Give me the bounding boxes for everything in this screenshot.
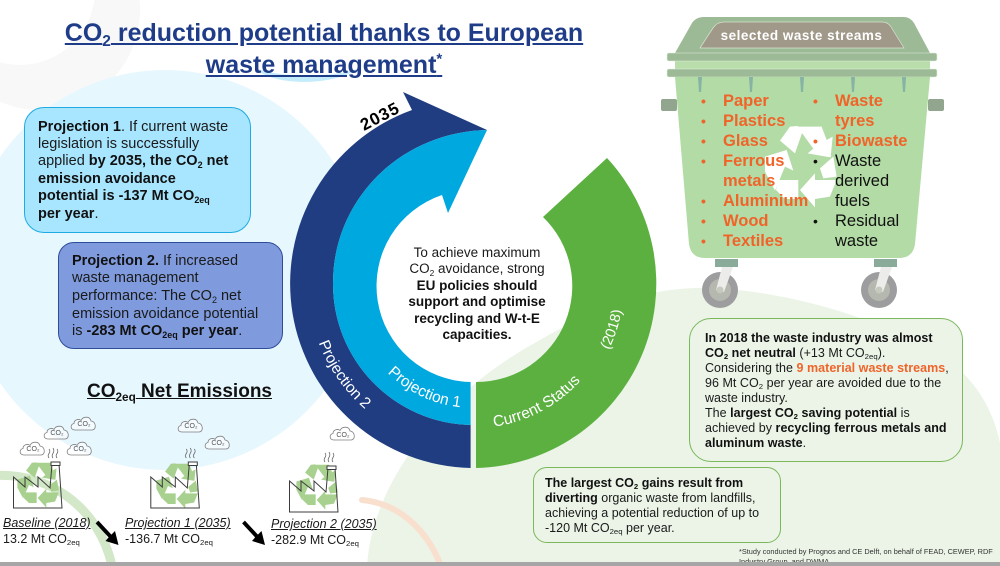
list: right waste streams: •	[813, 213, 818, 229]
icon: factory projection 2	[290, 427, 354, 512]
panel: projection 2	[58, 242, 283, 349]
panel: projection 1: legislation is successfully	[38, 136, 199, 152]
list: right waste streams: •	[813, 153, 818, 169]
list: left waste streams: Wood	[723, 212, 769, 230]
footnote: Industry Group, and DWMA.	[739, 557, 831, 566]
list: right waste streams: waste	[835, 232, 878, 250]
bin label: selected waste streams	[721, 28, 882, 43]
center message: To achieve maximum	[414, 245, 540, 260]
panel: organic waste: The largest CO2 gains result from	[545, 476, 743, 491]
panel: waste industry 2018: waste industry.	[705, 390, 788, 404]
title: waste management*	[206, 51, 442, 79]
label: 2035: 2035	[357, 98, 403, 135]
footnote: *Study conducted by Prognos and CE Delft, on behalf of FEAD, CEWEP, RDF	[739, 547, 993, 556]
list: left waste streams: Plastics	[723, 112, 785, 130]
list: left waste streams: •	[701, 133, 706, 149]
panel: waste industry 2018: achieved by recycling ferrous metals and	[705, 420, 947, 434]
list: left waste streams: •	[701, 113, 706, 129]
list: left waste streams: Aluminium	[723, 192, 808, 210]
panel: waste industry 2018: The largest CO2 saving potential is	[705, 406, 910, 421]
label: projection 1: Projection 1	[388, 366, 460, 408]
arc: current status	[476, 158, 656, 468]
arrow: projection 1 to projection 2	[242, 521, 265, 545]
faint decorative circles	[0, 0, 140, 110]
list: left waste streams: •	[701, 233, 706, 249]
panel: projection 1: emission avoidance	[38, 171, 176, 187]
title	[64, 19, 584, 79]
icon: factory projection 1: CO₂	[184, 423, 198, 430]
list: right waste streams: fuels	[835, 192, 870, 210]
title: CO2 reduction potential thanks to European	[65, 19, 583, 50]
label: current status: Current Status	[494, 376, 580, 426]
list: left waste streams: •	[701, 193, 706, 209]
list: left waste streams: Paper	[723, 92, 769, 110]
list: right waste streams: derived	[835, 172, 889, 190]
arrow: projection 2	[290, 92, 487, 468]
center message: CO2 avoidance, strong	[409, 261, 545, 278]
icon: factory baseline: CO₂	[77, 421, 91, 428]
center message: support and optimise	[408, 294, 546, 309]
icon: factory baseline: CO₂	[50, 430, 64, 437]
panel: projection 1: potential is -137 Mt CO2eq	[38, 188, 210, 205]
panel: projection 2: emission avoidance potential	[72, 306, 258, 322]
panel: organic waste: achieving a potential reduction of up to	[545, 506, 759, 520]
panel: waste industry 2018: Considering the 9 material waste streams,	[705, 360, 949, 374]
list: right waste streams: Waste	[835, 92, 883, 110]
panel: organic waste: diverting organic waste from landfills,	[545, 491, 756, 505]
panel: projection 1: applied by 2035, the CO2 net	[38, 153, 228, 170]
list: right waste streams: tyres	[835, 112, 874, 130]
panel: waste industry 2018	[689, 318, 963, 462]
list: left waste streams: •	[701, 213, 706, 229]
panel: waste industry 2018: aluminum waste.	[705, 436, 806, 450]
list: left waste streams: •	[701, 92, 706, 108]
stat: projection 1: Projection 1 (2035)	[125, 516, 231, 530]
list: left waste streams: Textiles	[723, 232, 783, 250]
footnote	[739, 547, 993, 566]
panel: projection 2: Projection 2. If increased	[72, 252, 238, 268]
list: left waste streams: •	[701, 153, 706, 169]
icon: factory projection 1	[151, 419, 229, 509]
label: projection 2: Projection 2	[319, 340, 371, 409]
list: right waste streams: Residual	[835, 212, 899, 230]
list: left waste streams	[701, 92, 808, 250]
panel: waste industry 2018: CO2 net neutral (+13 Mt CO2eq).	[705, 346, 885, 361]
list: right waste streams	[813, 92, 907, 250]
icon: waste bin	[661, 17, 944, 308]
list: left waste streams: Glass	[723, 132, 768, 150]
center message: capacities.	[442, 327, 512, 342]
icon: factory baseline: CO₂	[26, 446, 40, 453]
list: right waste streams: •	[813, 133, 818, 149]
center message	[408, 245, 546, 342]
bottom bar	[0, 562, 1000, 566]
stat: projection 2	[271, 517, 377, 548]
heading: net emissions: CO2eq Net Emissions	[87, 381, 272, 404]
panel: waste industry 2018: In 2018 the waste industry was almost	[705, 330, 933, 344]
panel: waste industry 2018: 96 Mt CO2 per year are avoided due to the	[705, 376, 941, 391]
arrow: projection 1	[333, 130, 487, 425]
stat: baseline	[3, 516, 91, 547]
stat: baseline: Baseline (2018)	[3, 516, 91, 530]
list: right waste streams: •	[813, 92, 818, 108]
panel: projection 2: is -283 Mt CO2eq per year.	[72, 323, 242, 340]
list: left waste streams: Ferrous	[723, 152, 784, 170]
stat: projection 2: Projection 2 (2035)	[271, 517, 377, 531]
center message: EU policies should	[417, 278, 537, 293]
arrow: baseline to projection 1	[96, 521, 118, 545]
icon: recycling symbol	[765, 126, 837, 207]
stat: baseline: 13.2 Mt CO2eq	[3, 532, 80, 547]
list: right waste streams: Waste	[835, 152, 881, 170]
stat: projection 1	[125, 516, 231, 547]
list: left waste streams: metals	[723, 172, 775, 190]
panel: organic waste: -120 Mt CO2eq per year.	[545, 521, 675, 536]
icon: factory baseline	[14, 417, 95, 508]
icon: factory projection 1: CO₂	[211, 440, 225, 447]
panel: projection 2: waste management	[72, 270, 199, 286]
center message: recycling and W-t-E	[414, 311, 540, 326]
stat: projection 1: -136.7 Mt CO2eq	[125, 532, 213, 547]
stat: projection 2: -282.9 Mt CO2eq	[271, 532, 359, 548]
panel: projection 1: Projection 1. If current waste	[38, 118, 228, 134]
list: right waste streams: Biowaste	[835, 132, 907, 150]
panel: organic waste	[533, 467, 781, 543]
panel: projection 1	[24, 107, 251, 233]
panel: projection 1: per year.	[38, 206, 98, 222]
label: 2018: (2018)	[600, 310, 624, 349]
panel: projection 2: performance: The CO2 net	[72, 288, 241, 305]
icon: factory baseline: CO₂	[73, 446, 87, 453]
icon: factory projection 2: CO₂	[336, 432, 350, 439]
